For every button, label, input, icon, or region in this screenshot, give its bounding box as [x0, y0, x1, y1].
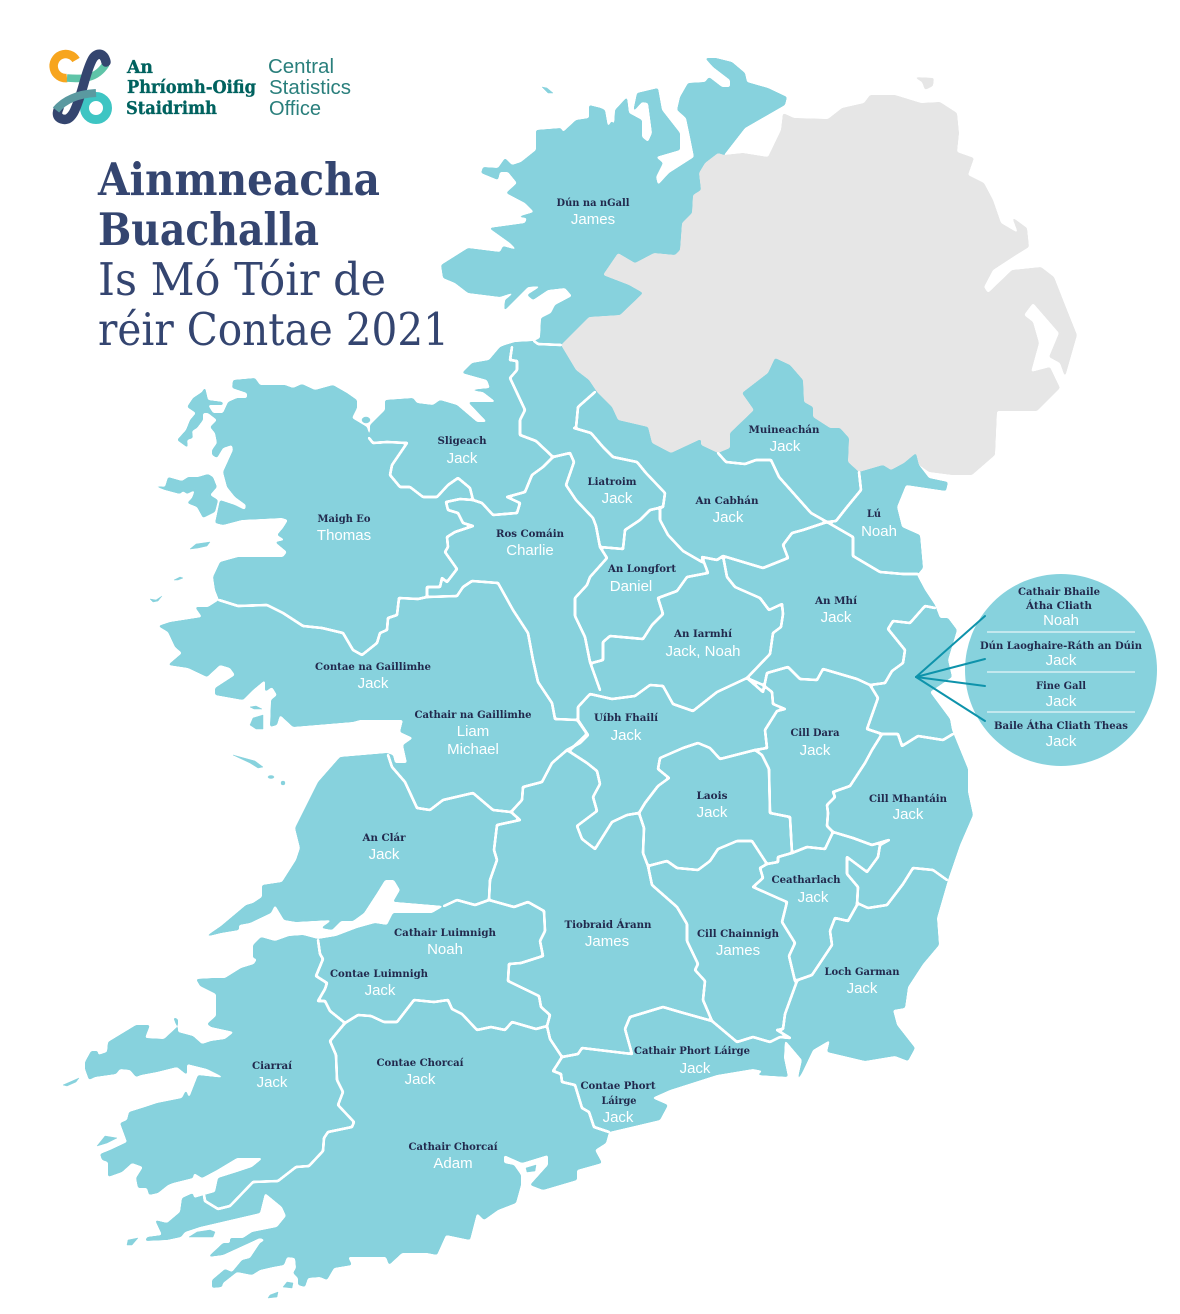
label: An Cabhán: Jack	[713, 509, 744, 526]
label: An Clár	[362, 832, 406, 863]
Dublin label: Fine Gall: Fine Gall	[1036, 680, 1086, 692]
label: Cill Dara	[790, 727, 840, 759]
label: Cathair Luimnigh	[394, 927, 496, 958]
label: Lú: Noah	[861, 523, 897, 540]
label: Maigh Eo	[317, 513, 371, 544]
map: small islands	[63, 87, 553, 1298]
label: Cill Chainnigh: James	[716, 942, 760, 959]
logo text: Irish name	[126, 58, 256, 119]
label: Cill Mhantáin: Cill Mhantáin	[869, 793, 947, 805]
map: county borders	[204, 341, 953, 1209]
label: An Iarmhí: An Iarmhí	[673, 628, 732, 640]
Dublin label: Fine Gall	[1036, 680, 1086, 710]
label: Contae Luimnigh: Jack	[365, 982, 396, 999]
label: Lú	[861, 508, 897, 540]
label: Liatroim: Liatroim	[588, 476, 636, 488]
label: Dún na nGall: Dún na nGall	[556, 197, 630, 209]
label: Muineachán: Muineachán	[748, 424, 820, 436]
label: An Clár: Jack	[369, 846, 400, 863]
Dublin label: Cathair Bhaile Átha Cliath: Cathair Bhaile	[1018, 586, 1100, 598]
label: Ros Comáin	[496, 528, 564, 559]
Dublin label: Baile Átha Cliath Theas: Baile Átha Cliath Theas	[994, 718, 1128, 732]
label: An Cabhán: An Cabhán	[695, 495, 759, 507]
logo text: English name: Office	[269, 97, 321, 120]
label: Contae na Gaillimhe: Jack	[358, 675, 389, 692]
label: An Cabhán	[695, 495, 759, 526]
label: Uíbh Fhailí: Jack	[611, 727, 642, 744]
label: Contae Chorcaí: Contae Chorcaí	[376, 1057, 464, 1069]
label: Cathair na Gaillimhe: Cathair na Gaillimhe	[414, 709, 532, 721]
label: Cathair Luimnigh: Cathair Luimnigh	[394, 927, 496, 939]
label: An Mhí: An Mhí	[814, 595, 857, 607]
logo text: Irish name: Staidrimh	[126, 99, 217, 119]
logo text: English name: Central	[268, 55, 334, 78]
label: Ceatharlach	[772, 874, 841, 906]
Dublin label: Cathair Bhaile Átha Cliath: Noah	[1043, 612, 1079, 629]
title: réir Contae 2021	[98, 303, 449, 356]
Dublin label: Cathair Bhaile Átha Cliath	[1018, 586, 1100, 629]
label: Contae Luimnigh	[330, 968, 428, 999]
label: Ciarraí: Jack	[257, 1074, 288, 1091]
label: Cathair Phort Láirge: Jack	[680, 1060, 711, 1077]
label: Contae Chorcaí: Jack	[405, 1071, 436, 1088]
Dublin label: Baile Átha Cliath Theas: Jack	[1046, 733, 1077, 750]
label: Dún na nGall	[556, 197, 630, 228]
label: Loch Garman: Jack	[847, 980, 878, 997]
label: An Mhí: Jack	[821, 609, 852, 626]
label: Cathair na Gaillimhe: Liam	[457, 723, 489, 740]
label: Cathair Luimnigh: Noah	[427, 941, 463, 958]
logo text: Irish name: An	[126, 58, 153, 78]
label: An Clár: An Clár	[362, 832, 406, 844]
Dublin label: Dún Laoghaire-Ráth an Dúin: Dún Laoghaire-Ráth an Dúin	[980, 640, 1142, 652]
label: Cathair na Gaillimhe	[414, 709, 532, 758]
label: Ciarraí	[252, 1060, 292, 1091]
callout connector lines	[916, 616, 985, 721]
title	[97, 153, 449, 356]
title: Ainmneacha	[97, 153, 380, 206]
label: Contae Phort Láirge: Láirge	[602, 1095, 637, 1107]
Dublin label: Fine Gall: Jack	[1046, 693, 1077, 710]
label: Sligeach: Jack	[447, 450, 478, 467]
label: Cill Chainnigh: Cill Chainnigh	[697, 928, 779, 940]
label: Cill Chainnigh	[697, 928, 779, 959]
label: Ceatharlach: Jack	[798, 889, 829, 906]
logo: Central Statistics Office	[54, 54, 351, 120]
label: Cathair na Gaillimhe: Michael	[447, 741, 499, 758]
label: An Longfort	[607, 563, 676, 595]
label: Cathair Chorcaí: Adam	[433, 1155, 473, 1172]
label: Tiobraid Árann	[564, 917, 652, 950]
label: Contae na Gaillimhe	[315, 661, 431, 692]
label: Lú: Lú	[867, 508, 881, 520]
label: Liatroim	[588, 476, 636, 507]
label: Contae Chorcaí	[376, 1057, 464, 1088]
label: Uíbh Fhailí	[594, 712, 658, 744]
label: Sligeach	[438, 435, 487, 467]
logo text: Irish name: Phríomh-Oifig	[127, 78, 256, 98]
label: Cill Mhantáin: Jack	[893, 806, 924, 823]
label: Cill Dara: Cill Dara	[790, 727, 840, 739]
title: Is Mó Tóir de	[98, 253, 386, 306]
label: Contae Phort Láirge: Contae Phort	[580, 1080, 656, 1092]
label: An Mhí	[814, 595, 857, 626]
label: Contae Luimnigh: Contae Luimnigh	[330, 968, 428, 980]
label: An Longfort: An Longfort	[607, 563, 676, 575]
title: Buachalla	[98, 203, 319, 256]
Dublin label: Dún Laoghaire-Ráth an Dúin	[980, 640, 1142, 669]
Dublin label: Cathair Bhaile Átha Cliath: Átha Cliath	[1025, 598, 1092, 612]
label: Contae na Gaillimhe: Contae na Gaillimhe	[315, 661, 431, 673]
label: Tiobraid Árann: James	[585, 933, 629, 950]
label: Cill Dara: Jack	[800, 742, 831, 759]
callout: Dublin circle	[916, 574, 1157, 766]
label: An Longfort: Daniel	[610, 578, 652, 595]
label: Laois: Laois	[696, 790, 728, 802]
label: Loch Garman	[824, 966, 900, 997]
Dublin label: Baile Átha Cliath Theas	[994, 718, 1128, 750]
county labels	[252, 197, 947, 1172]
map: Northern Ireland in grey	[561, 77, 1077, 475]
label: Maigh Eo: Maigh Eo	[318, 513, 370, 525]
Dublin label: Dún Laoghaire-Ráth an Dúin: Jack	[1046, 652, 1077, 669]
label: Uíbh Fhailí: Uíbh Fhailí	[594, 712, 658, 724]
label: Muineachán: Jack	[770, 438, 801, 455]
label: Cathair Chorcaí	[408, 1141, 498, 1172]
map: Republic of Ireland land	[85, 58, 973, 1288]
icon: logo knot	[54, 54, 108, 120]
label: Liatroim: Jack	[602, 490, 633, 507]
label: Ros Comáin: Ros Comáin	[496, 528, 564, 540]
label: Laois	[696, 790, 728, 821]
label: Contae Phort Láirge: Jack	[603, 1109, 634, 1126]
label: Cathair Chorcaí: Cathair Chorcaí	[408, 1141, 498, 1153]
label: Cill Mhantáin	[869, 793, 947, 823]
Achill Island	[151, 474, 218, 518]
label: Contae Phort Láirge	[580, 1080, 656, 1126]
label: Ros Comáin: Charlie	[506, 542, 554, 559]
label: Laois: Jack	[697, 804, 728, 821]
label: An Iarmhí: Jack, Noah	[665, 643, 741, 660]
label: Cathair Phort Láirge: Cathair Phort Láirge	[634, 1045, 750, 1057]
label: Cathair Phort Láirge	[634, 1045, 750, 1077]
label: Ciarraí: Ciarraí	[252, 1060, 292, 1072]
label: Ceatharlach: Ceatharlach	[772, 874, 841, 886]
label: Muineachán	[748, 424, 820, 455]
label: Tiobraid Árann: Tiobraid Árann	[564, 917, 652, 931]
label: Dún na nGall: James	[571, 211, 615, 228]
label: Maigh Eo: Thomas	[317, 527, 371, 544]
logo text: English name	[268, 55, 351, 120]
label: Loch Garman: Loch Garman	[824, 966, 900, 978]
logo text: English name: Statistics	[269, 76, 351, 99]
label: An Iarmhí	[665, 628, 741, 660]
label: Sligeach: Sligeach	[438, 435, 487, 447]
